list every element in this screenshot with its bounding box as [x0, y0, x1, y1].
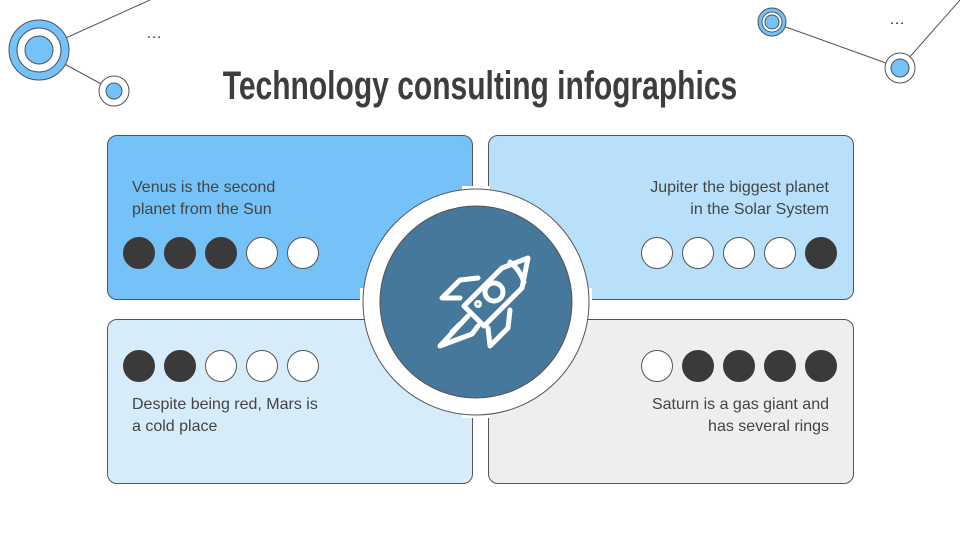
decoration: network lines: …: [146, 25, 162, 42]
center circle with rocket: [360, 186, 592, 418]
decoration: network lines: [8, 0, 960, 106]
icon: rocket: [440, 258, 528, 346]
text: venus: Venus is the second: [132, 179, 275, 196]
text: saturn: Saturn is a gas giant and: [652, 396, 829, 413]
text: saturn: [652, 396, 829, 435]
decoration: network lines: …: [889, 11, 905, 28]
text: venus: planet from the Sun: [132, 201, 272, 218]
dots: saturn: [641, 350, 837, 382]
panel: jupiter: [488, 135, 854, 300]
text: saturn: has several rings: [708, 418, 829, 435]
text: jupiter: Jupiter the biggest planet: [650, 179, 829, 196]
title: Technology consulting infographics: [223, 64, 737, 108]
dots: jupiter: [641, 237, 837, 269]
text: jupiter: [650, 179, 829, 218]
text: jupiter: in the Solar System: [690, 201, 829, 218]
text: venus: [132, 179, 275, 218]
text: mars: a cold place: [132, 418, 217, 435]
dots: mars: [123, 350, 319, 382]
panel: saturn: [488, 319, 854, 484]
dots: venus: [123, 237, 319, 269]
text: mars: Despite being red, Mars is: [132, 396, 318, 413]
panel: venus: [107, 135, 473, 300]
text: mars: [132, 396, 318, 435]
panel: mars: [107, 319, 473, 484]
